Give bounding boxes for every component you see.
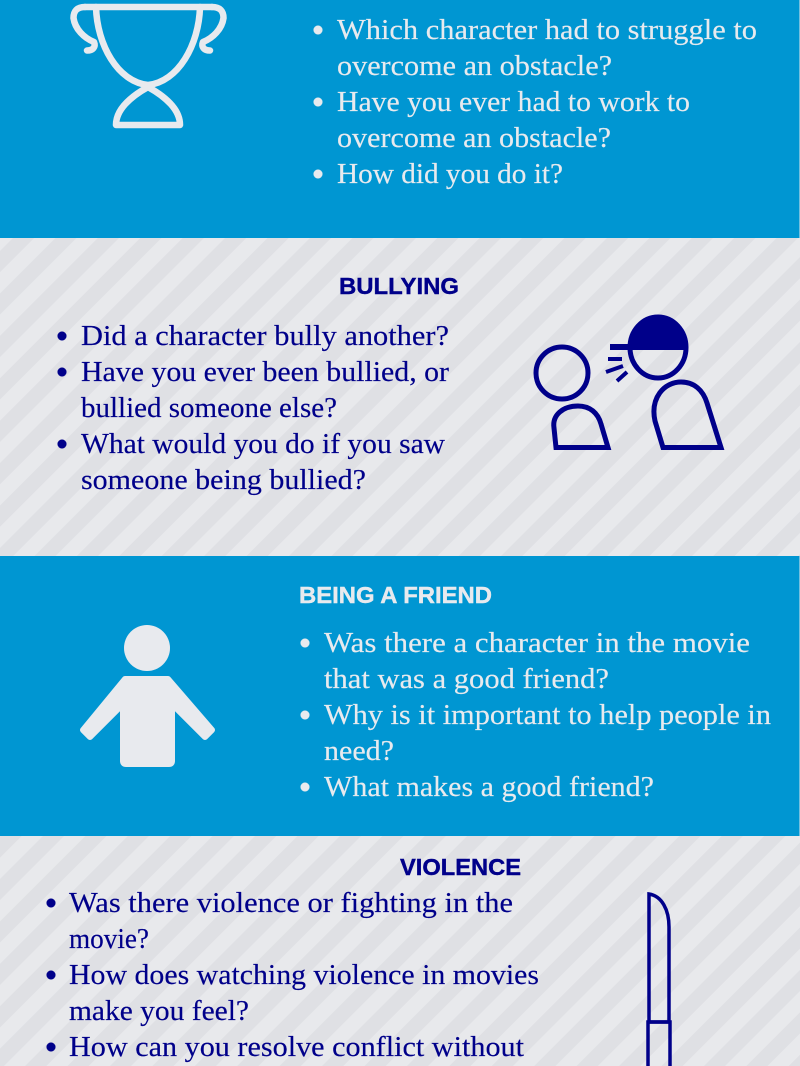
- text block: friend questions: Why is it important to help people in: [324, 700, 771, 731]
- text block: obstacle questions: Have you ever had to work to: [337, 87, 690, 118]
- icon: knife: [648, 894, 670, 1066]
- text block: violence questions: How does watching violence in movies: [69, 960, 539, 991]
- text block: friend questions: Was there a character in the movie: [324, 628, 750, 659]
- text block: violence questions: make you feel?: [69, 996, 249, 1027]
- panel: bullying: [0, 238, 800, 556]
- text block: friend questions: [300, 628, 771, 803]
- text block: obstacle questions: overcome an obstacle?: [337, 123, 611, 154]
- panel: overcoming obstacles: [0, 0, 800, 238]
- text block: violence questions: movie?: [69, 924, 149, 955]
- text block: violence questions: Was there violence or fighting in the: [69, 888, 513, 919]
- text block: bullying questions: Have you ever been bullied, or: [81, 357, 450, 388]
- text block: violence questions: How can you resolve conflict without: [69, 1032, 524, 1063]
- text block: friend questions: need?: [324, 736, 394, 767]
- heading: violence: VIOLENCE: [400, 854, 521, 880]
- text block: violence questions: [46, 888, 539, 1063]
- heading: bullying: BULLYING: [339, 273, 459, 299]
- text block: bullying questions: bullied someone else?: [81, 393, 337, 424]
- text block: obstacle questions: Which character had to struggle to: [337, 15, 757, 46]
- text block: obstacle questions: [314, 15, 757, 190]
- text block: obstacle questions: How did you do it?: [337, 159, 563, 190]
- text block: bullying questions: [58, 321, 450, 496]
- text block: friend questions: that was a good friend?: [324, 664, 609, 695]
- heading: being a friend: BEING A FRIEND: [299, 582, 492, 608]
- panel: being a friend: [0, 556, 800, 836]
- text block: bullying questions: Did a character bully another?: [81, 321, 449, 352]
- text block: bullying questions: someone being bullied?: [81, 465, 366, 496]
- text block: friend questions: What makes a good friend?: [324, 772, 654, 803]
- icon: person: [83, 625, 212, 764]
- panel: violence: [0, 836, 800, 1066]
- icon: trophy: [74, 7, 224, 125]
- text block: bullying questions: What would you do if you saw: [81, 429, 446, 460]
- text block: obstacle questions: overcome an obstacle?: [337, 51, 612, 82]
- icon: bully and victim: [536, 315, 721, 448]
